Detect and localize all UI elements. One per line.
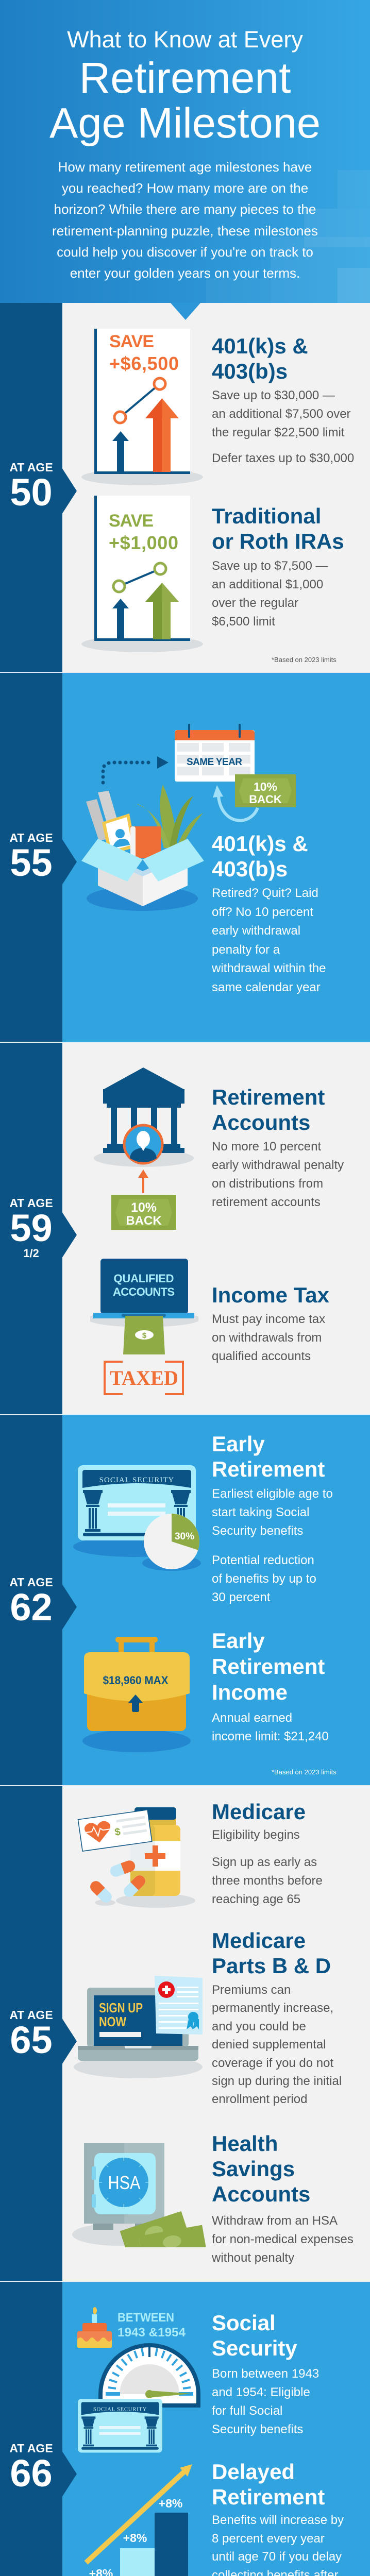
text: premiums: permanently increase, <box>212 2001 333 2015</box>
heading: 401k 403b age 55: 403(b)s <box>212 857 288 881</box>
text: no penalty: retirement accounts <box>212 1195 321 1209</box>
text: 8 percent increase: until age 70 if you delay <box>212 2550 342 2564</box>
age label: 66 <box>0 2443 62 2489</box>
text: reduction: of benefits by up to <box>212 1572 316 1586</box>
text: premiums: coverage if you do not <box>212 2056 333 2070</box>
chevron <box>62 1585 77 1629</box>
text: reduction <box>212 1553 316 1604</box>
heading: social security: Security <box>212 2336 297 2360</box>
text: no penalty: on distributions from <box>212 1177 323 1191</box>
icon: 401k chart save 6500: +$6,500 <box>109 353 179 374</box>
arrow: dotted arrow to calendar <box>101 756 169 784</box>
heading: early retirement income: Income <box>212 1680 288 1704</box>
panel: age 50 <box>0 303 370 672</box>
heading: IRAs <box>212 504 344 553</box>
age label: 59 1/2 <box>9 1196 53 1260</box>
text: premiums: enrollment period <box>212 2092 307 2106</box>
icon: cake between 1943 and 1954: BETWEEN <box>117 2311 174 2325</box>
age label: 65: AT AGE <box>9 2008 53 2022</box>
text: born 1943-1954: for full Social <box>212 2404 282 2418</box>
heading: 401k 403b age 55 <box>212 832 308 881</box>
heading: retirement accounts: Accounts <box>212 1110 310 1134</box>
text: reduction: Potential reduction <box>212 1553 314 1567</box>
panel: age 62 <box>0 1414 370 1785</box>
chevron <box>62 1213 77 1257</box>
icon: cake between 1943 and 1954 <box>75 2302 191 2351</box>
text: premiums: Premiums can <box>212 1983 291 1997</box>
text: rule of 55: penalty for a <box>212 943 280 957</box>
text: HSA: without penalty <box>212 2251 294 2265</box>
heading: 401k 403b <box>212 334 308 383</box>
age label: 50: 50 <box>10 471 53 514</box>
panel: age 59 1/2 <box>0 1042 370 1414</box>
text: 8 percent increase <box>212 2511 344 2576</box>
age label: 59 1/2: 1/2 <box>23 1247 39 1260</box>
icon: IRA chart save 1000: +$1,000 <box>109 532 178 553</box>
text: rule of 55 <box>212 886 326 994</box>
text: rule of 55: withdrawal within the <box>212 961 326 975</box>
bar chart: delayed retirement: +8% <box>123 2531 147 2545</box>
panel: age 55 <box>0 672 370 1042</box>
text: premiums: and you could be <box>212 2020 306 2033</box>
chevron <box>62 840 77 884</box>
text: 8 percent increase: Benefits will increase by <box>212 2513 344 2527</box>
text: HSA: for non-medical expenses <box>212 2232 354 2246</box>
heading: income tax: Income Tax <box>212 1283 329 1307</box>
heading: delayed retirement: Retirement <box>212 2485 325 2509</box>
age label: 59 1/2: AT AGE <box>9 1196 53 1210</box>
icon: IRA chart save 1000 <box>81 496 203 652</box>
heading: medicare: Medicare <box>212 1800 306 1824</box>
panel: age 65 <box>0 1785 370 2281</box>
heading: health savings accounts <box>212 2131 310 2207</box>
icon: moving box <box>81 785 204 911</box>
heading: medicare parts b and d: Medicare <box>212 1928 306 1953</box>
text: 401k limits: Save up to $30,000 — <box>212 388 335 402</box>
text: sign up early <box>212 1855 323 1906</box>
heading: delayed retirement <box>212 2459 325 2510</box>
header pointer <box>171 303 200 320</box>
text: born 1943-1954 <box>212 2365 319 2439</box>
title: Age Milestone <box>49 99 321 147</box>
text: rule of 55: off? No 10 percent <box>212 905 313 919</box>
heading: early retirement: Early <box>212 1432 265 1456</box>
age label: 50: AT AGE <box>9 461 53 474</box>
icon: gauge and social security card <box>75 2341 204 2457</box>
text: rule of 55: same calendar year <box>212 980 321 994</box>
icon: bank with person: BACK <box>126 1214 162 1228</box>
heading: early retirement: Retirement <box>212 1457 325 1481</box>
heading: delayed retirement: Delayed <box>212 2460 295 2484</box>
icon: qualified accounts taxed: QUALIFIED <box>113 1272 174 1285</box>
icon: briefcase 18960 max <box>82 1637 191 1752</box>
text: no penalty: No more 10 percent <box>212 1140 321 1154</box>
heading: health savings accounts: Health <box>212 2131 278 2156</box>
icon: medicine bottle and card <box>77 1807 195 1908</box>
text: IRA limits: $6,500 limit <box>212 615 275 629</box>
icon: social security card with 30% pie <box>73 1465 201 1571</box>
text: IRA limits: an additional $1,000 <box>212 578 323 591</box>
heading: early retirement <box>212 1432 325 1481</box>
text: rule of 55: early withdrawal <box>212 924 300 938</box>
age label: 59 1/2: 59 <box>10 1207 53 1249</box>
text: 401k limits: the regular $22,500 limit <box>212 426 344 439</box>
text: eligibility: Eligibility begins <box>212 1828 300 1842</box>
age label: 62: AT AGE <box>9 1575 53 1589</box>
text: income tax: qualified accounts <box>212 1349 311 1363</box>
text: born 1943-1954: Born between 1943 <box>212 2367 319 2381</box>
footnote: *Based on 2023 limits <box>272 1768 337 1776</box>
text: IRA limits: Save up to $7,500 — <box>212 559 328 573</box>
age label: 55: AT AGE <box>9 831 53 844</box>
heading: 401k 403b age 55: 401(k)s & <box>212 832 308 856</box>
intro text: enter your golden years on your terms. <box>70 265 300 281</box>
heading: social security <box>212 2310 297 2361</box>
chevron <box>62 469 77 513</box>
text: rule of 55: Retired? Quit? Laid <box>212 886 318 900</box>
panel: age 66 <box>0 2281 370 2576</box>
heading: medicare parts b and d <box>212 1928 331 1978</box>
header panel <box>0 0 370 303</box>
heading: 401k 403b: 403(b)s <box>212 359 288 383</box>
text: earliest age: Earliest eligible age to <box>212 1487 333 1501</box>
text: born 1943-1954: and 1954: Eligible <box>212 2385 310 2399</box>
text: no penalty <box>212 1140 344 1209</box>
heading: medicare parts b and d: Parts B & D <box>212 1954 331 1978</box>
icon: social security card with 30% pie: SOCIAL SECURITY <box>99 1476 174 1484</box>
text: 401k limits: an additional $7,500 over <box>212 407 351 421</box>
icon: qualified accounts taxed <box>90 1259 198 1395</box>
icon: qualified accounts taxed: TAXED <box>110 1366 178 1389</box>
text: income tax: on withdrawals from <box>212 1331 322 1345</box>
icon: 401k chart save 6500: SAVE <box>109 332 154 351</box>
icon: 401k chart save 6500 <box>81 329 203 485</box>
age label: 66: AT AGE <box>9 2442 53 2455</box>
text: income limit <box>212 1711 329 1743</box>
heading: retirement accounts: Retirement <box>212 1085 325 1109</box>
decorative squares <box>271 170 370 303</box>
text: HSA <box>212 2212 354 2267</box>
text: income tax: Must pay income tax <box>212 1312 325 1326</box>
heading: health savings accounts: Savings <box>212 2157 295 2181</box>
icon: HSA safe with money <box>72 2139 206 2247</box>
intro text <box>52 159 318 281</box>
heading: social security: Social <box>212 2311 276 2335</box>
icon: calendar same year <box>175 724 255 782</box>
chevron <box>62 2451 77 2497</box>
title <box>49 26 321 147</box>
icon: HSA safe with money: HSA <box>108 2172 140 2193</box>
text: HSA: Withdraw from an HSA <box>212 2214 338 2228</box>
heading: IRAs: or Roth IRAs <box>212 529 344 553</box>
text: 8 percent increase: 8 percent every year <box>212 2532 325 2546</box>
icon: IRA chart save 1000: SAVE <box>109 511 154 531</box>
age label: 62: 62 <box>10 1586 53 1629</box>
icon: 10% back bill with curved arrow <box>213 774 296 822</box>
icon: 10% back bill with curved arrow: 10% <box>254 780 277 793</box>
icon: 10% back bill with curved arrow: BACK <box>249 793 282 806</box>
text: earliest age: start taking Social <box>212 1505 309 1519</box>
bar chart: delayed retirement <box>72 2462 211 2576</box>
text: sign up early: three months before <box>212 1874 323 1888</box>
bar chart: delayed retirement: +8% <box>159 2497 182 2510</box>
icon: gauge and social security card: SOCIAL SECURITY <box>93 2406 147 2413</box>
icon: qualified accounts taxed: ACCOUNTS <box>113 1285 175 1298</box>
text: sign up early: Sign up as early as <box>212 1855 317 1869</box>
icon: laptop sign up now: NOW <box>99 2014 126 2029</box>
text: sign up early: reaching age 65 <box>212 1892 300 1906</box>
text: premiums: denied supplemental <box>212 2038 326 2052</box>
text: income tax <box>212 1312 325 1363</box>
icon: medicine bottle and card: $ <box>114 1826 121 1838</box>
text: defer taxes: Defer taxes up to $30,000 <box>212 451 354 465</box>
text: premiums: sign up during the initial <box>212 2074 342 2088</box>
icon: bank with person <box>94 1067 194 1230</box>
age label: 66: 66 <box>10 2452 53 2495</box>
intro text: you reached? How many more are on the <box>62 180 308 196</box>
chevron <box>62 2019 77 2064</box>
icon: cake between 1943 and 1954: 1943 &1954 <box>117 2326 186 2340</box>
heading: early retirement income <box>212 1629 325 1704</box>
heading: early retirement income: Early <box>212 1629 265 1653</box>
title: What to Know at Every <box>67 26 303 53</box>
icon: briefcase 18960 max: $18,960 MAX <box>103 1674 169 1687</box>
text: reduction: 30 percent <box>212 1590 270 1604</box>
text: income limit: income limit: $21,240 <box>212 1730 329 1743</box>
intro text: horizon? While there are many pieces to the <box>54 201 316 217</box>
heading: retirement accounts <box>212 1085 325 1134</box>
text: IRA limits <box>212 559 328 629</box>
text: earliest age <box>212 1487 333 1538</box>
age label: 65: 65 <box>10 2019 53 2061</box>
text: 401k limits <box>212 388 351 439</box>
age label: 55: 55 <box>10 841 53 884</box>
intro text: How many retirement age milestones have <box>58 159 312 175</box>
icon: laptop sign up now <box>72 1972 206 2080</box>
icon: calendar same year: SAME YEAR <box>187 757 242 768</box>
heading: 401k 403b: 401(k)s & <box>212 334 308 358</box>
heading: IRAs: Traditional <box>212 504 321 528</box>
icon: bank with person: 10% <box>131 1200 157 1215</box>
intro text: could help you discover if you're on track to <box>57 244 313 260</box>
icon: laptop sign up now: SIGN UP <box>99 2000 143 2015</box>
title: Retirement <box>79 54 291 102</box>
text: income limit: Annual earned <box>212 1711 292 1725</box>
heading: health savings accounts: Accounts <box>212 2182 310 2206</box>
heading: early retirement income: Retirement <box>212 1654 325 1679</box>
text: born 1943-1954: Security benefits <box>212 2422 303 2436</box>
icon: social security card with 30% pie: 30% <box>175 1531 194 1542</box>
text: earliest age: Security benefits <box>212 1524 303 1538</box>
text: IRA limits: over the regular <box>212 596 298 610</box>
footnote: *Based on 2023 limits <box>272 656 337 664</box>
intro text: retirement-planning puzzle, these milestones <box>52 223 318 239</box>
icon: qualified accounts taxed: $ <box>142 1331 147 1340</box>
text: premiums <box>212 1981 342 2109</box>
text: no penalty: early withdrawal penalty <box>212 1158 344 1172</box>
